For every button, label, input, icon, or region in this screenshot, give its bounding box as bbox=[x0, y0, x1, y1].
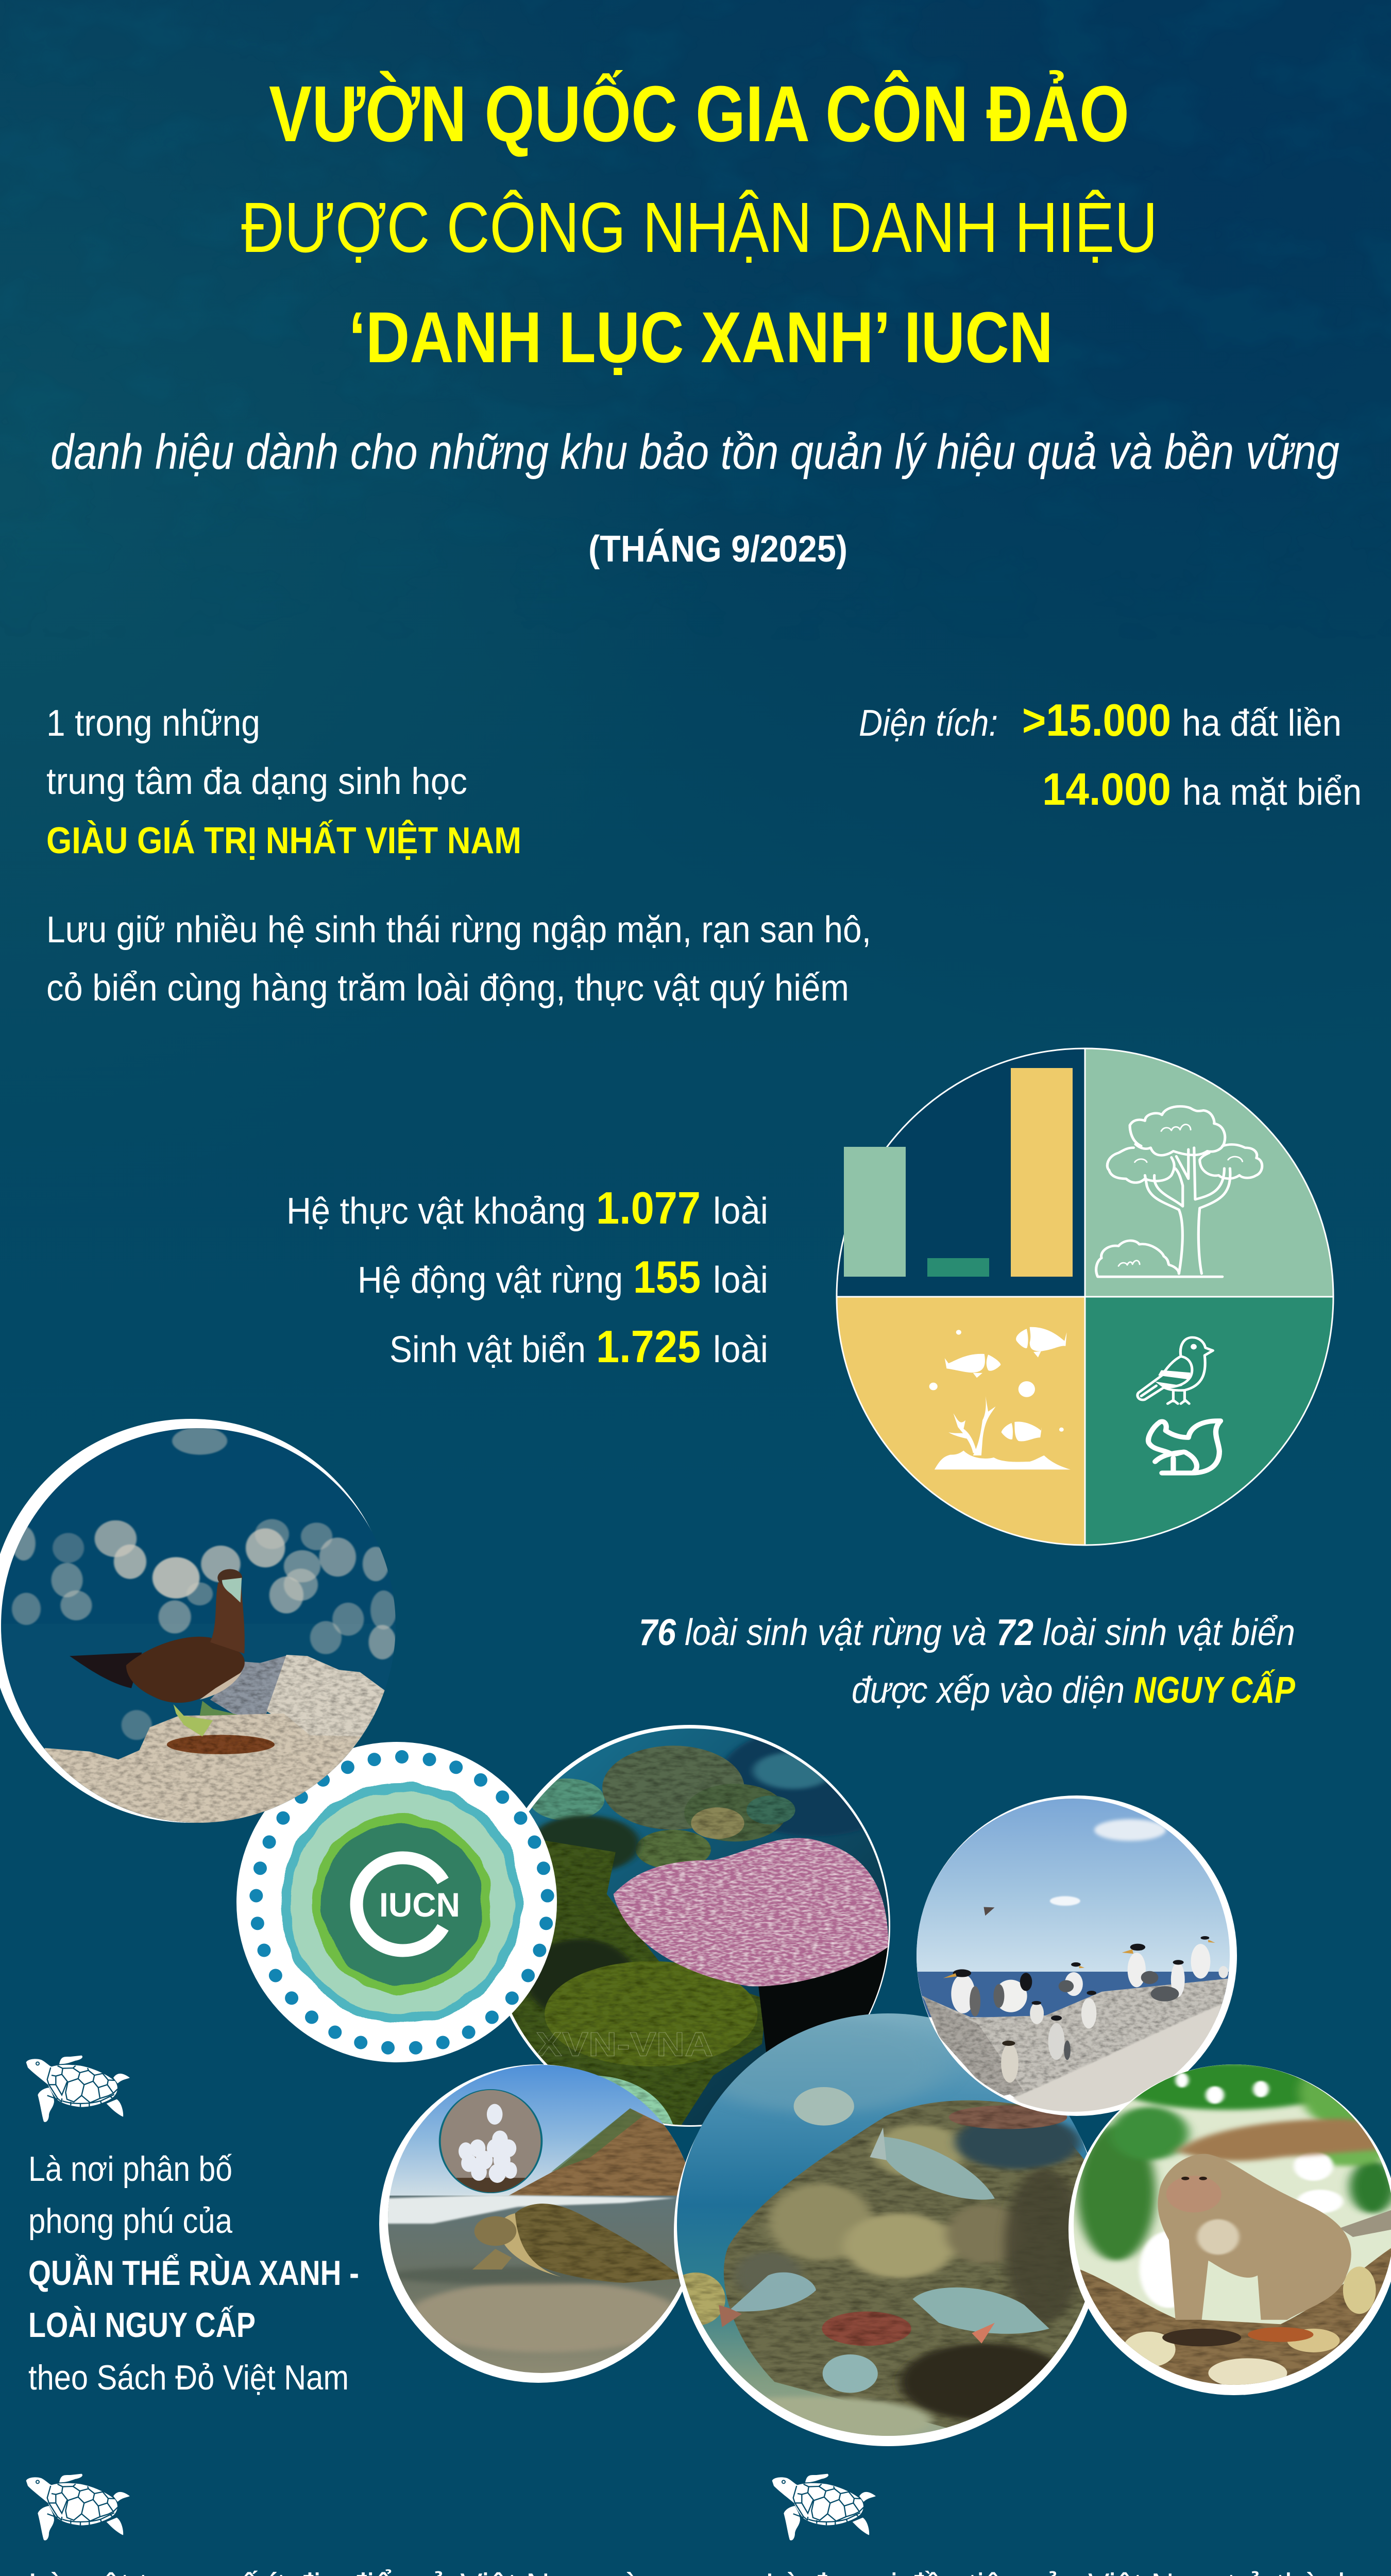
text block: area: Diện tích: bbox=[859, 703, 998, 744]
icon: tree bbox=[1096, 1106, 1262, 1277]
photo: terns on rocks bbox=[913, 1795, 1237, 2116]
logo: IUCN green list badge: IUCN bbox=[379, 1886, 460, 1924]
text block: area: ha đất liền bbox=[1182, 703, 1342, 744]
title bbox=[241, 70, 1158, 378]
text block: species counts: loài bbox=[713, 1260, 768, 1301]
text block: green turtle population: theo Sách Đỏ Việt Nam bbox=[28, 2358, 349, 2397]
text block: ecosystems: cỏ biển cùng hàng trăm loài động, thực vật quý hiếm bbox=[46, 968, 849, 1009]
text block: species counts: Hệ động vật rừng bbox=[358, 1260, 623, 1301]
text block: biodiversity centre bbox=[46, 703, 521, 861]
title: ĐƯỢC CÔNG NHẬN DANH HIỆU bbox=[241, 188, 1158, 267]
icon: sea turtle left bbox=[26, 2474, 130, 2540]
text block: endangered species: loài sinh vật rừng và bbox=[685, 1612, 987, 1653]
logo: IUCN green list badge bbox=[236, 1742, 557, 2062]
text block: species counts: 155 bbox=[633, 1251, 701, 1302]
icon: fish and coral bbox=[929, 1327, 1071, 1469]
text block: species counts: loài bbox=[713, 1329, 768, 1370]
photo: macaque on branch bbox=[1064, 2057, 1391, 2395]
text block: ecosystems: Lưu giữ nhiều hệ sinh thái rừng ngập mặn, rạn san hô, bbox=[46, 909, 871, 951]
photo: brown booby on rock bbox=[0, 1417, 412, 1831]
text block: endangered species: loài sinh vật biển bbox=[1043, 1612, 1295, 1653]
text block: area: ha mặt biển bbox=[1182, 772, 1362, 813]
text block: endangered species bbox=[639, 1612, 1296, 1711]
title: ‘DANH LỤC XANH’ IUCN bbox=[349, 297, 1053, 378]
text block: species counts: loài bbox=[713, 1191, 768, 1232]
chart: species circle with four quadrants bbox=[837, 1048, 1333, 1545]
text block: species counts bbox=[286, 1182, 768, 1372]
photo: coral reef: XVN-VNA bbox=[536, 2025, 713, 2063]
photo: fish over reef bbox=[663, 2009, 1110, 2446]
icon: sea turtle bbox=[26, 2056, 130, 2122]
text block: species counts: 1.725 bbox=[596, 1321, 701, 1372]
bar chart bbox=[844, 1068, 1073, 1277]
text block: species counts: Hệ thực vật khoảng bbox=[286, 1191, 586, 1232]
icon: bird and squirrel bbox=[1138, 1337, 1220, 1473]
text block: endangered species: được xếp vào diện bbox=[852, 1670, 1125, 1711]
background bbox=[0, 0, 1391, 845]
text block: area: 14.000 bbox=[1042, 764, 1171, 815]
photo: green turtle on beach bbox=[379, 2062, 709, 2383]
text block: area: >15.000 bbox=[1022, 694, 1171, 745]
photo: coral reef bbox=[510, 1725, 890, 2127]
icon: sea turtle right bbox=[772, 2474, 876, 2540]
text block: endangered species: 76 bbox=[639, 1612, 676, 1653]
text block: endangered species: 72 bbox=[996, 1612, 1033, 1653]
text block: biodiversity centre: GIÀU GIÁ TRỊ NHẤT VIỆT NAM bbox=[46, 820, 521, 861]
text block: species counts: 1.077 bbox=[596, 1182, 701, 1233]
text block: ecosystems bbox=[46, 909, 871, 1009]
text block: biodiversity centre: trung tâm đa dạng sinh học bbox=[46, 761, 467, 802]
title: VƯỜN QUỐC GIA CÔN ĐẢO bbox=[269, 70, 1129, 158]
text block: green turtle population: Là nơi phân bố bbox=[28, 2149, 232, 2189]
text block: green turtle population: LOÀI NGUY CẤP bbox=[28, 2305, 256, 2345]
text block: endangered species: NGUY CẤP bbox=[1134, 1669, 1296, 1711]
text block: biodiversity centre: 1 trong những bbox=[46, 703, 260, 744]
text block: area bbox=[859, 694, 1362, 815]
text block: green turtle population: QUẦN THỂ RÙA XANH - bbox=[28, 2253, 359, 2293]
text block: green turtle population: phong phú của bbox=[28, 2201, 232, 2241]
date: (THÁNG 9/2025) bbox=[588, 529, 847, 570]
text block: green turtle population bbox=[28, 2149, 359, 2397]
text block: species counts: Sinh vật biển bbox=[389, 1329, 586, 1370]
